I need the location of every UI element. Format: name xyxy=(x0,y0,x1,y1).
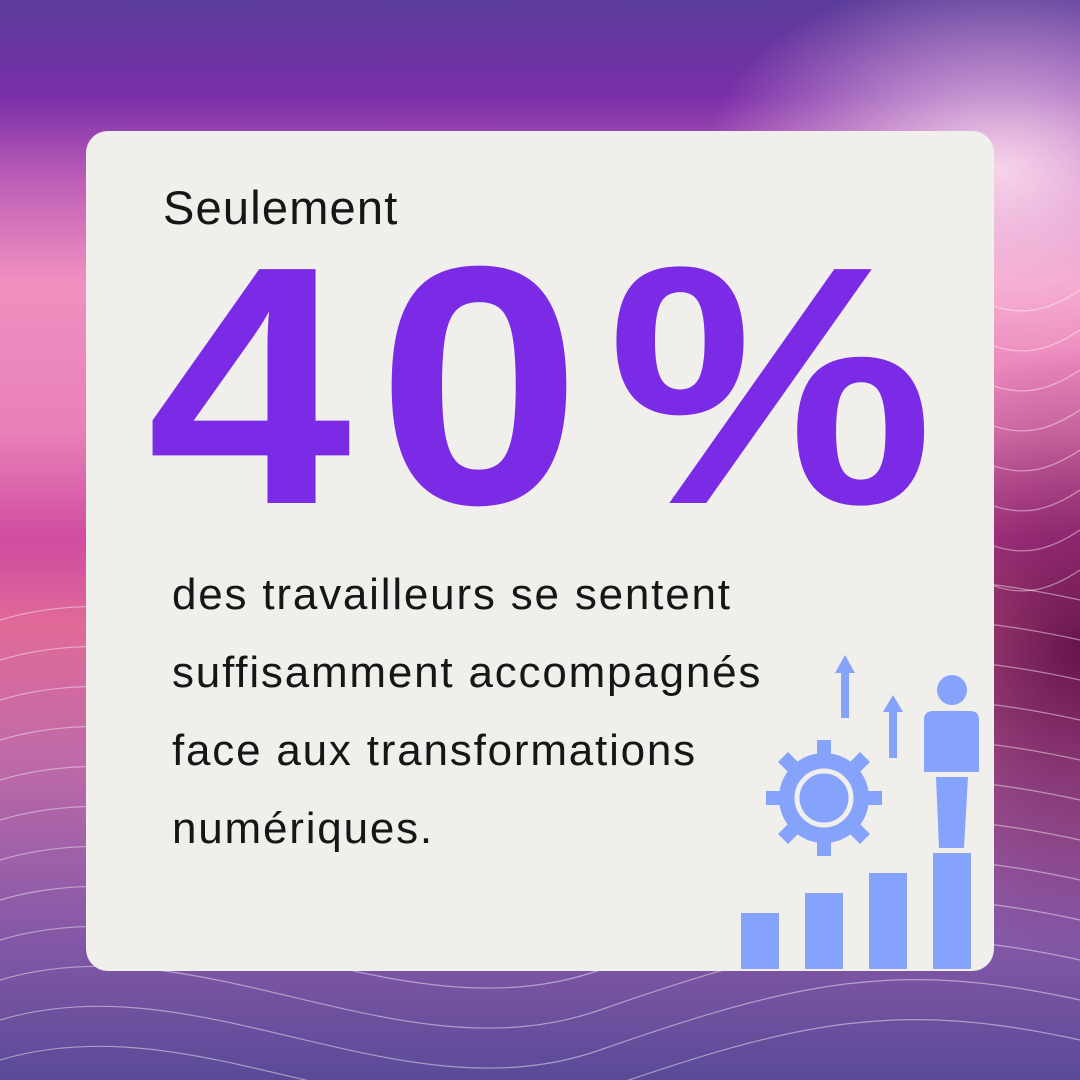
heading: Seulement: Seulement xyxy=(163,181,398,234)
body text xyxy=(172,570,762,853)
body text: face aux transformations xyxy=(172,726,697,775)
body text: numériques. xyxy=(172,804,434,853)
big number 40%: 40% xyxy=(147,196,960,576)
body text: des travailleurs se sentent xyxy=(172,570,732,619)
card panel xyxy=(86,131,994,971)
body text: suffisamment accompagnés xyxy=(172,648,762,697)
